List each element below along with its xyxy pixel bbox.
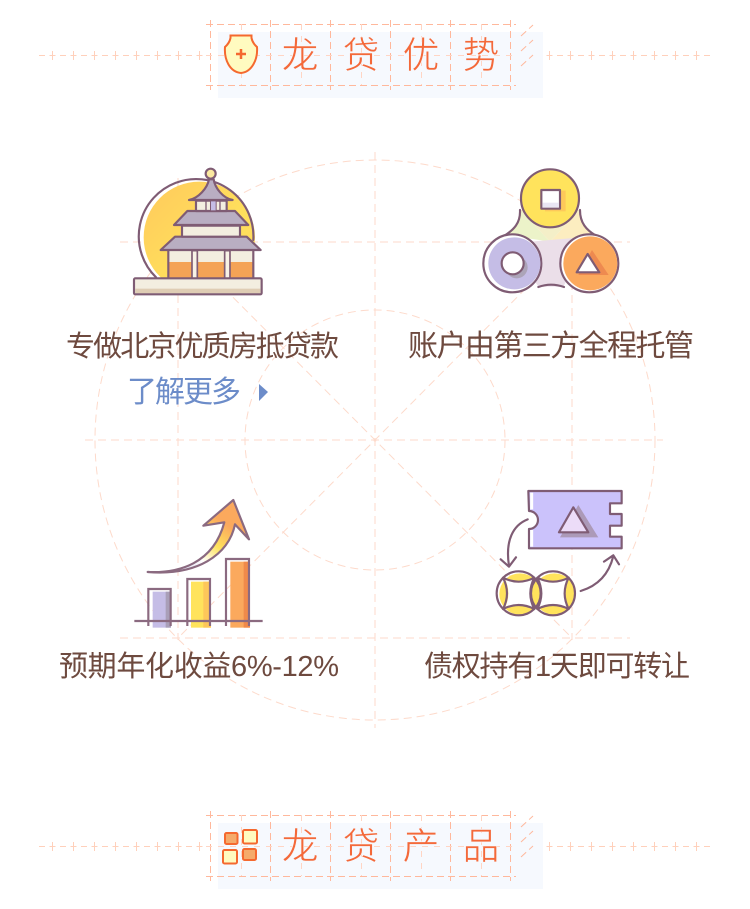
panel: 北京 temple [66,169,339,409]
header panel [218,32,543,98]
heading text: 贷 [342,35,380,76]
background guide pattern [85,152,663,728]
icon: shield [225,36,257,73]
panel: 预期收益 [59,500,339,683]
icon: rising bar chart [134,500,263,628]
right ornament line [546,842,711,851]
heading text: 势 [462,35,500,76]
icon: three coins [483,169,618,292]
right ornament line [546,51,711,60]
heading text: 优 [402,35,440,76]
header guide grid [206,811,533,881]
icon: four squares [223,830,257,864]
link: 了解更多: 了解更多 [127,376,241,409]
icon: arrow [259,384,268,401]
header: 龙贷产品 [39,811,711,889]
heading text: 龙 [282,35,318,76]
panel: 债权转让 [424,491,690,683]
panel: 资金托管 [408,169,694,363]
label: 账户由第三方全程托管 [408,330,694,363]
label: 债权持有1天即可转让 [424,650,690,683]
header guide grid [206,20,533,90]
heading text [282,35,500,76]
heading text: 龙 [282,826,318,867]
left ornament line [39,842,205,851]
heading text: 品 [462,826,500,867]
label: 专做北京优质房抵贷款 [66,330,339,363]
icon: temple [134,169,262,294]
left ornament line [39,51,205,60]
label: 预期年化收益6%-12% [59,650,339,683]
icon: ticket exchange [497,491,622,615]
header panel [218,823,543,889]
heading text [282,826,500,867]
heading text: 产 [402,826,440,867]
header: 龙贷优势 [39,20,711,98]
heading text: 贷 [342,826,380,867]
